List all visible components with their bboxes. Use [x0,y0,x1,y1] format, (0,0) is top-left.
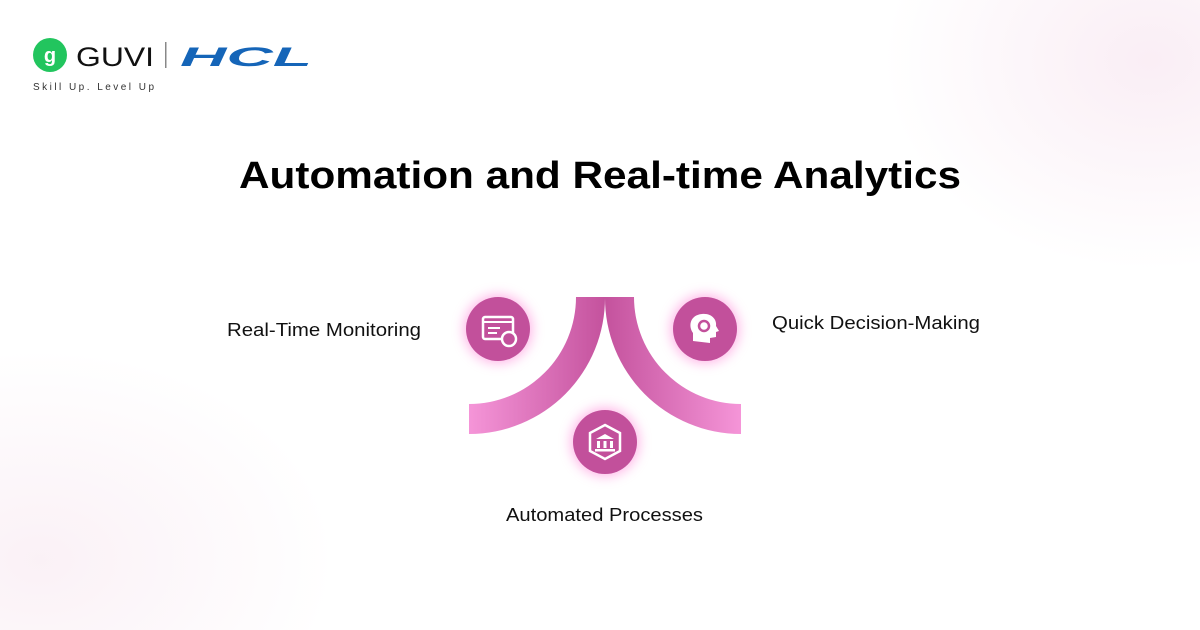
title: Automation and Real-time Analytics [239,155,961,197]
icon: quick decision-making [671,295,739,363]
logo [33,38,312,93]
label: automated processes: Automated Processes [506,505,703,525]
left arc [469,297,605,434]
logo: GUVI [76,42,154,72]
logo: Skill Up. Level Up [33,82,154,93]
icon: real-time monitoring [464,295,532,363]
logo: g [44,45,56,67]
icon: automated processes [571,408,639,476]
right arc [605,297,741,434]
logo: HCL [180,42,312,72]
label: real-time monitoring: Real-Time Monitoring [227,320,421,340]
label: quick decision-making: Quick Decision-Making [772,313,980,333]
